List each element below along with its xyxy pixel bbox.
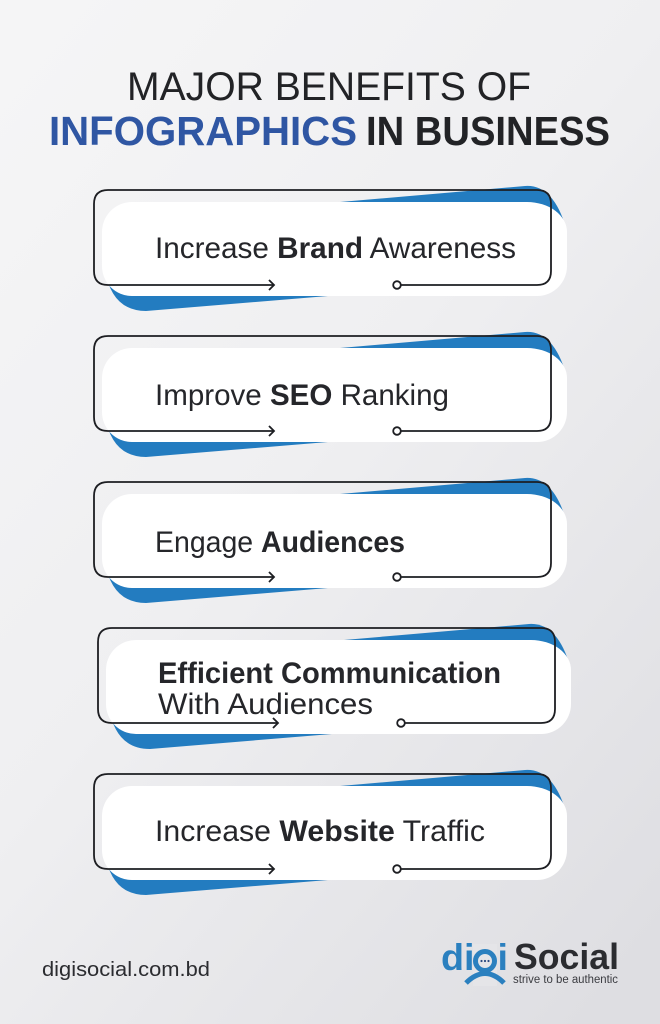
title [49, 65, 610, 154]
panel: efficient communication [98, 624, 571, 749]
logo: Social [514, 936, 619, 977]
panel: increase brand awareness: Increase Brand Awareness [155, 232, 516, 265]
panel: increase website traffic: Increase Website Traffic [155, 815, 485, 848]
icon: digi mark: digi [441, 937, 508, 978]
panel: improve seo ranking [94, 332, 567, 457]
panel: increase brand awareness [94, 186, 567, 311]
website url: digisocial.com.bd [42, 959, 210, 981]
panel: engage audiences [94, 478, 567, 603]
panel: engage audiences: Engage Audiences [155, 526, 405, 559]
panel: efficient communication: With Audiences [158, 688, 373, 721]
panel: increase website traffic [94, 770, 567, 895]
title: INFOGRAPHICS [49, 108, 357, 154]
title: MAJOR BENEFITS OF [127, 65, 531, 109]
panel: efficient communication: Efficient Communication [158, 657, 501, 690]
logo: strive to be authentic [513, 974, 618, 986]
logo [441, 936, 619, 986]
title: IN BUSINESS [366, 108, 610, 154]
panel: improve seo ranking: Improve SEO Ranking [155, 379, 449, 412]
